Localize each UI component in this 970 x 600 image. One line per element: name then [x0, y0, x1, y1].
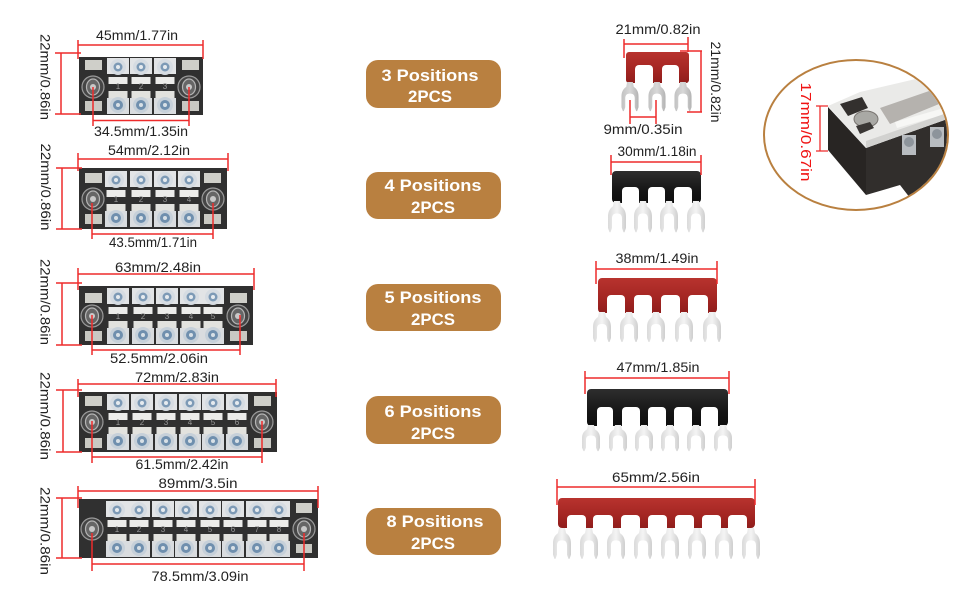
label: 8 positions — [366, 508, 501, 555]
terminal block: 8 positions: 3 — [161, 525, 166, 534]
terminal block: 8 positions: 2 — [137, 525, 142, 534]
dimensions: block height — [797, 82, 828, 182]
jumper: 3 positions, red — [621, 52, 692, 111]
dimensions: block height: 17mm/0.67in — [797, 82, 814, 182]
terminal block: 8 positions: 4 — [184, 525, 189, 534]
label: 6 positions: 2PCS — [411, 424, 455, 443]
terminal block: 6 positions: 3 — [164, 418, 169, 427]
dimensions: 3 positions jumper: 21mm/0.82in — [616, 21, 700, 37]
terminal block: 4 positions: 1 — [114, 195, 119, 204]
dimensions: 5 positions block: 63mm/2.48in — [115, 259, 201, 275]
terminal block: 5 positions: 3 — [165, 312, 170, 321]
dimensions: 5 positions jumper: 38mm/1.49in — [616, 250, 698, 266]
dimensions: 5 positions block — [38, 259, 254, 366]
dimensions: 5 positions jumper — [596, 250, 717, 284]
terminal block: 5 positions: 5 — [211, 312, 216, 321]
label: 4 positions — [366, 172, 501, 219]
dimensions: 3 positions block: 45mm/1.77in — [96, 27, 178, 43]
callout: block height detail — [764, 60, 950, 215]
label: 3 positions — [366, 60, 501, 108]
terminal block: 8 positions: 6 — [231, 525, 236, 534]
dimensions: 6 positions jumper — [585, 359, 729, 394]
label: 6 positions — [366, 396, 501, 444]
dimensions: 3 positions jumper — [604, 21, 724, 137]
terminal block: 3 positions: 1 — [116, 82, 121, 91]
terminal block: 6 positions: 1 — [116, 418, 121, 427]
dimensions: 8 positions jumper — [557, 469, 755, 505]
dimensions: 4 positions block — [38, 142, 228, 250]
terminal block: 5 positions — [79, 286, 253, 345]
terminal block: 5 positions: 1 — [116, 312, 121, 321]
dimensions: 4 positions jumper — [611, 143, 701, 175]
terminal block: 5 positions: 4 — [189, 312, 194, 321]
terminal block: 6 positions: 2 — [140, 418, 145, 427]
dimensions: 3 positions jumper: 21mm/0.82in — [708, 42, 724, 122]
label: 5 positions: 2PCS — [411, 310, 455, 329]
dimensions: 3 positions jumper: 9mm/0.35in — [604, 121, 682, 137]
label: 4 positions: 4 Positions — [384, 176, 482, 195]
label: 5 positions: 5 Positions — [384, 288, 482, 307]
dimensions: 5 positions block: 22mm/0.86in — [38, 259, 54, 345]
dimensions: 8 positions block: 22mm/0.86in — [38, 487, 54, 575]
terminal block: 4 positions: 4 — [187, 195, 192, 204]
dimensions: 8 positions block: 78.5mm/3.09in — [152, 568, 248, 584]
label: 8 positions: 2PCS — [411, 534, 455, 553]
terminal block: 5 positions: 2 — [141, 312, 146, 321]
dimensions: 8 positions jumper: 65mm/2.56in — [612, 469, 700, 485]
terminal block: 8 positions: 8 — [277, 525, 282, 534]
terminal block: 4 positions — [79, 168, 227, 229]
label: 4 positions: 2PCS — [411, 198, 455, 217]
terminal block: 3 positions — [79, 57, 203, 115]
terminal block: 8 positions: 1 — [115, 525, 120, 534]
dimensions: 5 positions block: 52.5mm/2.06in — [110, 350, 208, 366]
terminal block: 4 positions: 2 — [139, 195, 144, 204]
dimensions: 3 positions block — [38, 27, 203, 139]
label: 3 positions: 3 Positions — [382, 66, 478, 85]
terminal block: 6 positions — [79, 392, 277, 452]
jumper: 4 positions, black — [608, 171, 705, 232]
terminal block: 6 positions: 5 — [211, 418, 216, 427]
dimensions: 6 positions block — [38, 369, 276, 472]
label: 6 positions: 6 Positions — [384, 402, 482, 421]
dimensions: 6 positions block: 22mm/0.86in — [38, 372, 54, 460]
dimensions: 4 positions block: 43.5mm/1.71in — [109, 234, 197, 250]
terminal block: 6 positions: 6 — [235, 418, 240, 427]
dimensions: 3 positions block: 22mm/0.86in — [38, 34, 54, 120]
dimensions: 4 positions block: 54mm/2.12in — [108, 142, 190, 158]
label: 8 positions: 8 Positions — [386, 512, 484, 531]
terminal block: 8 positions — [79, 499, 318, 558]
dimensions: 8 positions block — [38, 475, 318, 584]
dimensions: 4 positions jumper: 30mm/1.18in — [618, 143, 696, 159]
dimensions: 6 positions block: 61.5mm/2.42in — [136, 456, 228, 472]
dimensions: 4 positions block: 22mm/0.86in — [38, 144, 54, 230]
jumper: 8 positions, red — [553, 498, 760, 559]
terminal block: 8 positions: 5 — [208, 525, 213, 534]
dimensions: 6 positions jumper: 47mm/1.85in — [616, 359, 700, 375]
jumper: 5 positions, red — [593, 278, 721, 342]
dimensions: 6 positions block: 72mm/2.83in — [135, 369, 219, 385]
terminal block: 4 positions: 3 — [163, 195, 168, 204]
terminal block: 3 positions: 3 — [163, 82, 168, 91]
dimensions: 3 positions block: 34.5mm/1.35in — [94, 123, 188, 139]
label: 3 positions: 2PCS — [408, 87, 452, 106]
terminal block: 6 positions: 4 — [188, 418, 193, 427]
jumper: 6 positions, black — [582, 389, 732, 451]
label: 5 positions — [366, 284, 501, 331]
terminal block: 8 positions: 7 — [255, 525, 260, 534]
dimensions: 8 positions block: 89mm/3.5in — [158, 475, 238, 491]
terminal block: 3 positions: 2 — [139, 82, 144, 91]
